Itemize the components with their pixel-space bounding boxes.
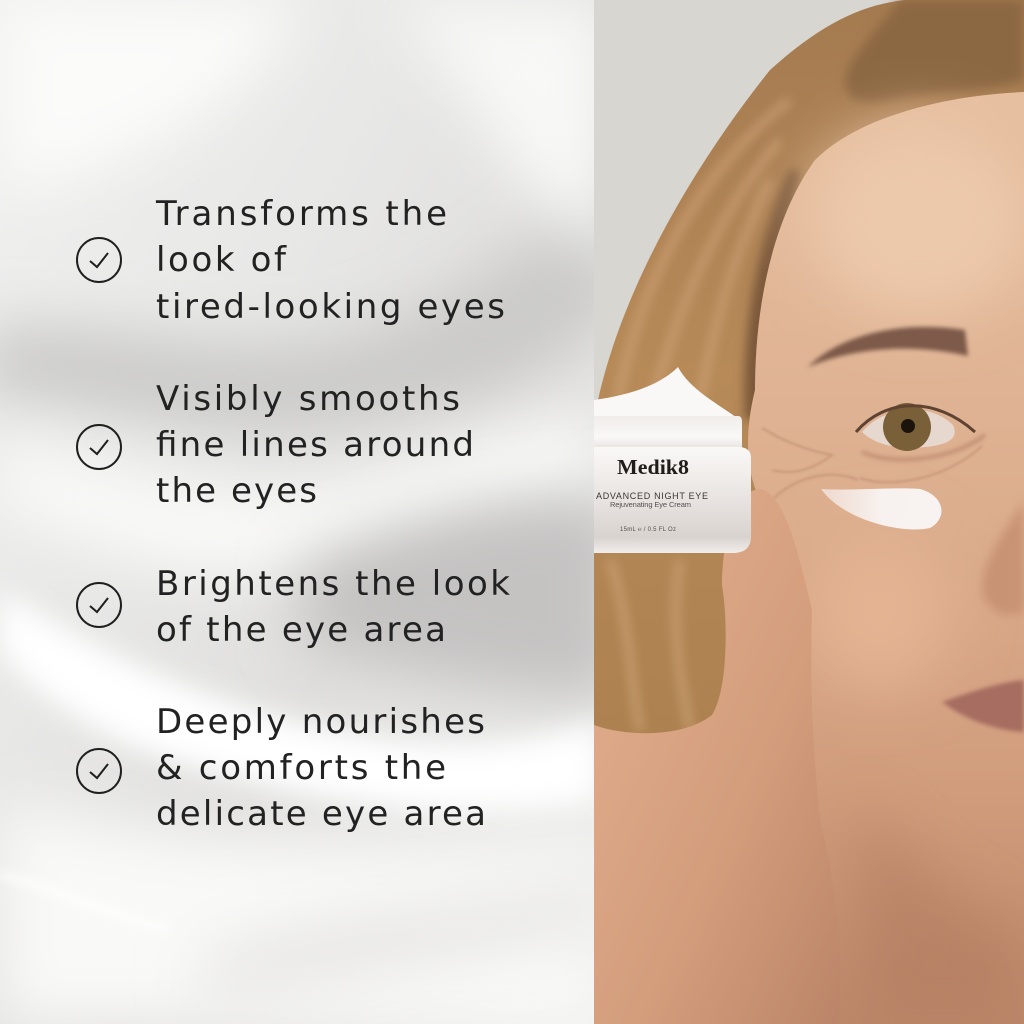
- benefit 4 text: & comforts the: [156, 748, 446, 788]
- panel: silk background: [0, 0, 620, 1024]
- panel: product photo: [594, 0, 1024, 1024]
- check icon 1: [77, 238, 121, 282]
- benefit 3 text: [156, 564, 510, 650]
- face: [748, 92, 1024, 1024]
- benefit 3 text: of the eye area: [156, 610, 446, 650]
- check icon 2: [77, 425, 121, 469]
- benefit 1 text: [155, 194, 505, 327]
- benefit 1 text: tired-looking eyes: [156, 287, 505, 327]
- eye: [862, 410, 955, 448]
- benefit 2 text: [156, 379, 474, 511]
- benefit 1 text: Transforms the: [155, 194, 447, 234]
- check icon 4: [77, 749, 121, 793]
- product descriptor: Rejuvenating Eye Cream: [610, 500, 691, 509]
- check icon 3: [77, 583, 121, 627]
- benefit 4 text: [156, 702, 486, 834]
- photo backdrop: [594, 0, 904, 400]
- product name: ADVANCED NIGHT EYE: [596, 491, 708, 501]
- benefit 2: [77, 379, 474, 511]
- hair: [594, 0, 1024, 742]
- brand name: Medik8: [617, 455, 689, 479]
- benefit 3 text: Brightens the look: [156, 564, 510, 604]
- benefit 4: [77, 702, 486, 834]
- benefit 2 text: Visibly smooths: [156, 379, 460, 419]
- lips: [942, 680, 1024, 732]
- benefit 4 text: delicate eye area: [156, 794, 486, 834]
- benefit 1 text: look of: [156, 240, 287, 280]
- eye wrinkles: [762, 428, 982, 498]
- eyebrow: [808, 327, 968, 367]
- cream: [594, 367, 734, 416]
- benefit 4 text: Deeply nourishes: [156, 702, 485, 742]
- benefit 1: [77, 194, 505, 327]
- volume: 15mL ℮ / 0.5 FL Oz: [620, 527, 676, 533]
- cream swatch under eye: [821, 488, 941, 529]
- cream jar: [594, 367, 751, 553]
- benefit 2 text: the eyes: [156, 471, 317, 511]
- nose: [983, 500, 1024, 615]
- jar body: [594, 447, 751, 553]
- benefit 3: [77, 564, 510, 650]
- jar lid band: [594, 416, 742, 448]
- benefit 2 text: fine lines around: [156, 425, 474, 465]
- hand and thumb: [594, 489, 812, 1024]
